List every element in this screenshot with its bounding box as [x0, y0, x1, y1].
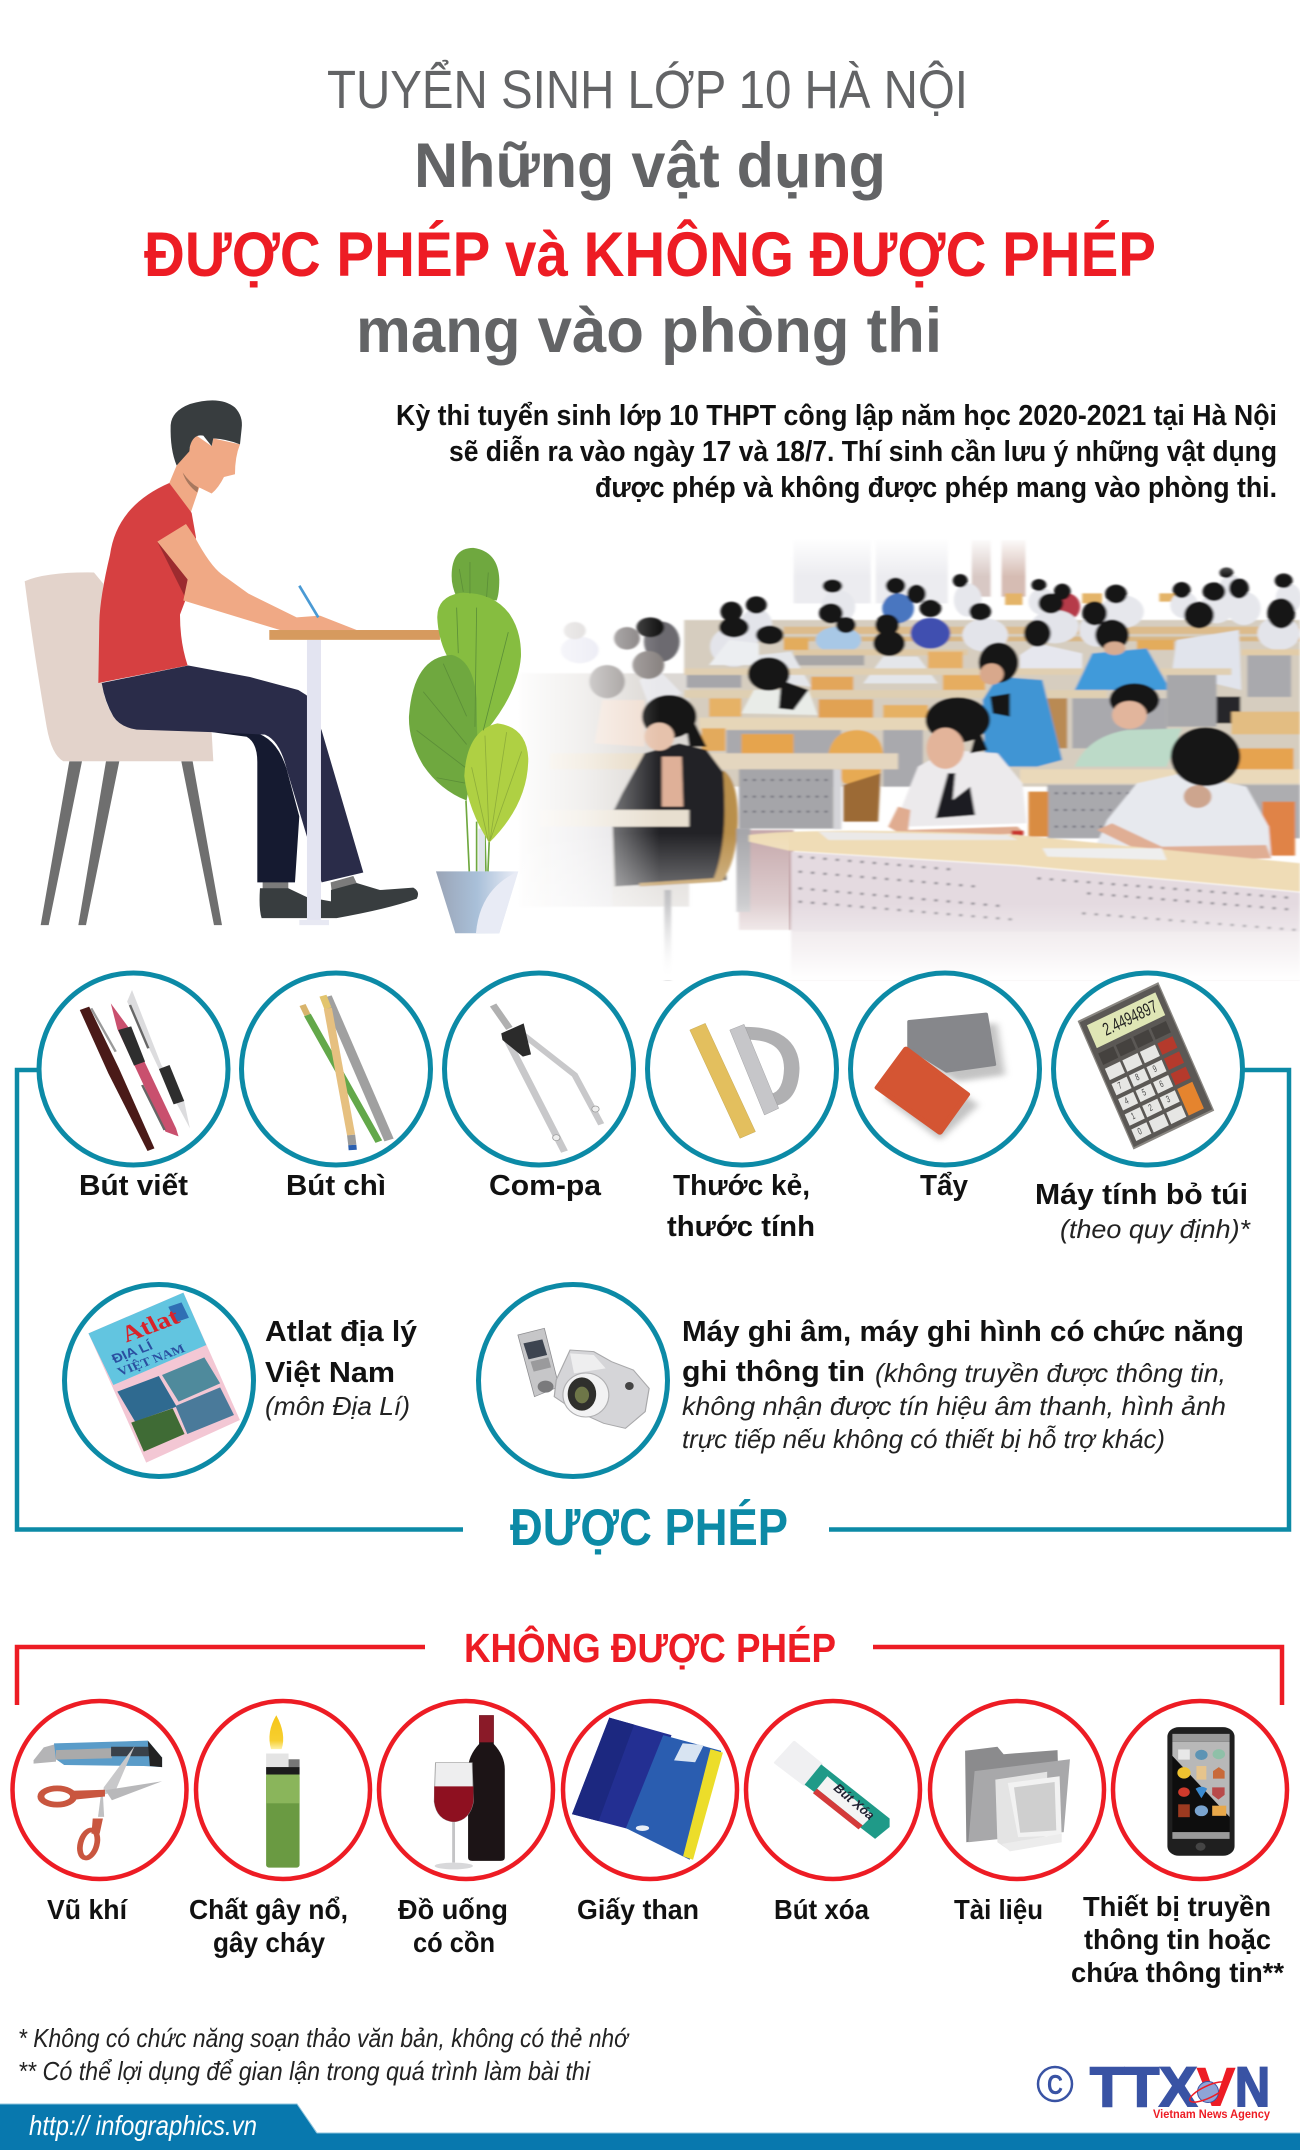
icon: calculator: 9 — [1151, 1063, 1159, 1075]
icon: atlas book: Atlat — [116, 1303, 184, 1348]
footnotes: * Không có chức năng soạn thảo văn bản, không có thẻ nhớ — [18, 2023, 630, 2053]
chair — [25, 572, 222, 925]
icon: pencils — [303, 996, 389, 1150]
icon: weapons — [34, 1741, 162, 1859]
labels: prohibited items: Tài liệu — [954, 1894, 1043, 1925]
label: recording devices: Máy ghi âm, máy ghi hình có chức năng — [682, 1316, 1244, 1348]
icon: recorder and camera — [518, 1328, 649, 1428]
labels: prohibited items: Vũ khí — [47, 1894, 128, 1925]
labels: allowed items: Com-pa — [489, 1170, 602, 1202]
icon: calculator: 2 — [1147, 1102, 1155, 1113]
label: recording devices — [682, 1316, 1244, 1454]
heading: allowed: ĐƯỢC PHÉP — [510, 1499, 788, 1557]
icon: atlas book: ĐỊA LÍ — [109, 1337, 156, 1366]
icon: calculator — [1079, 983, 1213, 1148]
label: atlas: Atlat địa lý — [265, 1316, 417, 1348]
icon: correction pen — [776, 1742, 890, 1839]
title line: exam room: mang vào phòng thi — [356, 296, 942, 366]
labels: prohibited items: Chất gây nổ, — [189, 1894, 348, 1925]
icon: blue pen — [299, 586, 318, 617]
labels: allowed items: Bút viết — [79, 1170, 188, 1202]
logo: TTXVN: V — [1196, 2055, 1236, 2118]
labels: allowed items: (theo quy định)* — [1060, 1214, 1251, 1244]
icon: erasers — [877, 1014, 1005, 1140]
icon: rulers — [690, 1023, 792, 1138]
title line: items: Những vật dụng — [414, 131, 886, 201]
icon: calculator: 8 — [1134, 1072, 1141, 1083]
labels: prohibited items: gây cháy — [213, 1927, 326, 1958]
icon: smartphone — [1167, 1727, 1235, 1856]
footnotes — [18, 2023, 630, 2086]
labels: allowed items: Thước kẻ, — [673, 1170, 810, 1202]
footer bar — [0, 2104, 1300, 2150]
title line: exam name: TUYỂN SINH LỚP 10 HÀ NỘI — [327, 60, 968, 120]
labels: allowed items: thước tính — [667, 1211, 815, 1243]
icon: calculator: 5 — [1140, 1087, 1148, 1098]
label: atlas: (môn Địa Lí) — [265, 1391, 410, 1421]
icon: calculator: 3 — [1164, 1093, 1172, 1105]
icon: copyright — [1038, 2067, 1072, 2101]
labels: allowed items — [79, 1170, 1251, 1244]
icon: calculator: 4 — [1123, 1095, 1131, 1107]
labels: prohibited items: chứa thông tin** — [1071, 1957, 1284, 1988]
labels: prohibited items: Bút xóa — [774, 1894, 870, 1925]
icon: carbon paper — [572, 1718, 723, 1860]
labels: allowed items: Máy tính bỏ túi — [1035, 1179, 1248, 1211]
illustration: student at desk — [25, 400, 528, 933]
icon: correction pen: Bút Xóa — [830, 1781, 879, 1822]
icon: compass — [493, 1005, 601, 1152]
logo: TTXVN: Vietnam News Agency — [1153, 2109, 1271, 2121]
frame: allowed — [17, 1070, 1289, 1530]
title line: allowed and not allowed: ĐƯỢC PHÉP và KHÔNG ĐƯỢC PHÉP — [144, 219, 1156, 290]
icon: atlas book — [88, 1293, 240, 1463]
icon: copyright: C — [1047, 2069, 1063, 2100]
icon: atlas book: VIỆT NAM — [115, 1341, 188, 1378]
intro text — [396, 400, 1277, 504]
footer link: http:// infographics.vn — [29, 2110, 257, 2141]
logo: TTXVN: N — [1235, 2055, 1270, 2118]
frame: prohibited — [17, 1647, 1282, 1705]
logo: TTXVN: TTX — [1090, 2055, 1197, 2118]
labels: prohibited items: Giấy than — [577, 1894, 699, 1925]
label: recording devices: không nhận được tín hiệu âm thanh, hình ảnh — [682, 1391, 1226, 1421]
labels: allowed items: Bút chì — [286, 1170, 386, 1202]
icon: calculator: 1 — [1129, 1110, 1137, 1122]
plant — [409, 548, 528, 933]
heading: prohibited: KHÔNG ĐƯỢC PHÉP — [464, 1625, 836, 1671]
icon: documents folder — [965, 1747, 1070, 1851]
panel: allowed items — [17, 973, 1289, 1557]
title — [144, 60, 1156, 366]
label: recording devices: (không truyền được thông tin, — [875, 1358, 1226, 1388]
icon: pens — [80, 990, 190, 1151]
label: recording devices: trực tiếp nếu không có thiết bị hỗ trợ khác) — [682, 1424, 1165, 1454]
label: recording devices: ghi thông tin — [682, 1356, 865, 1388]
icon: wine — [434, 1715, 505, 1869]
labels: prohibited items — [47, 1891, 1284, 1988]
footnotes: ** Có thể lợi dụng để gian lận trong quá trình làm bài thi — [18, 2056, 591, 2086]
logo: TTXVN — [1038, 2055, 1271, 2121]
circles: allowed items — [39, 973, 1242, 1476]
icon: calculator: 6 — [1158, 1078, 1166, 1090]
photo: exam room — [510, 537, 1300, 983]
labels: prohibited items: thông tin hoặc — [1084, 1924, 1271, 1955]
icon: calculator: 7 — [1116, 1080, 1124, 1091]
labels: prohibited items: Đồ uống — [398, 1894, 508, 1925]
icon: calculator: 0 — [1136, 1126, 1144, 1137]
desk — [269, 630, 440, 925]
labels: prohibited items: có cồn — [413, 1927, 495, 1958]
icon: lighter — [266, 1715, 300, 1868]
icon: calculator: 2.4494897 — [1100, 997, 1160, 1040]
circles: prohibited items — [12, 1701, 1287, 1879]
student — [98, 400, 418, 918]
panel: prohibited items — [12, 1625, 1287, 1988]
labels: allowed items: Tẩy — [920, 1170, 968, 1202]
label: atlas: Việt Nam — [265, 1357, 395, 1389]
label: atlas — [265, 1316, 417, 1421]
labels: prohibited items: Thiết bị truyền — [1083, 1891, 1271, 1922]
